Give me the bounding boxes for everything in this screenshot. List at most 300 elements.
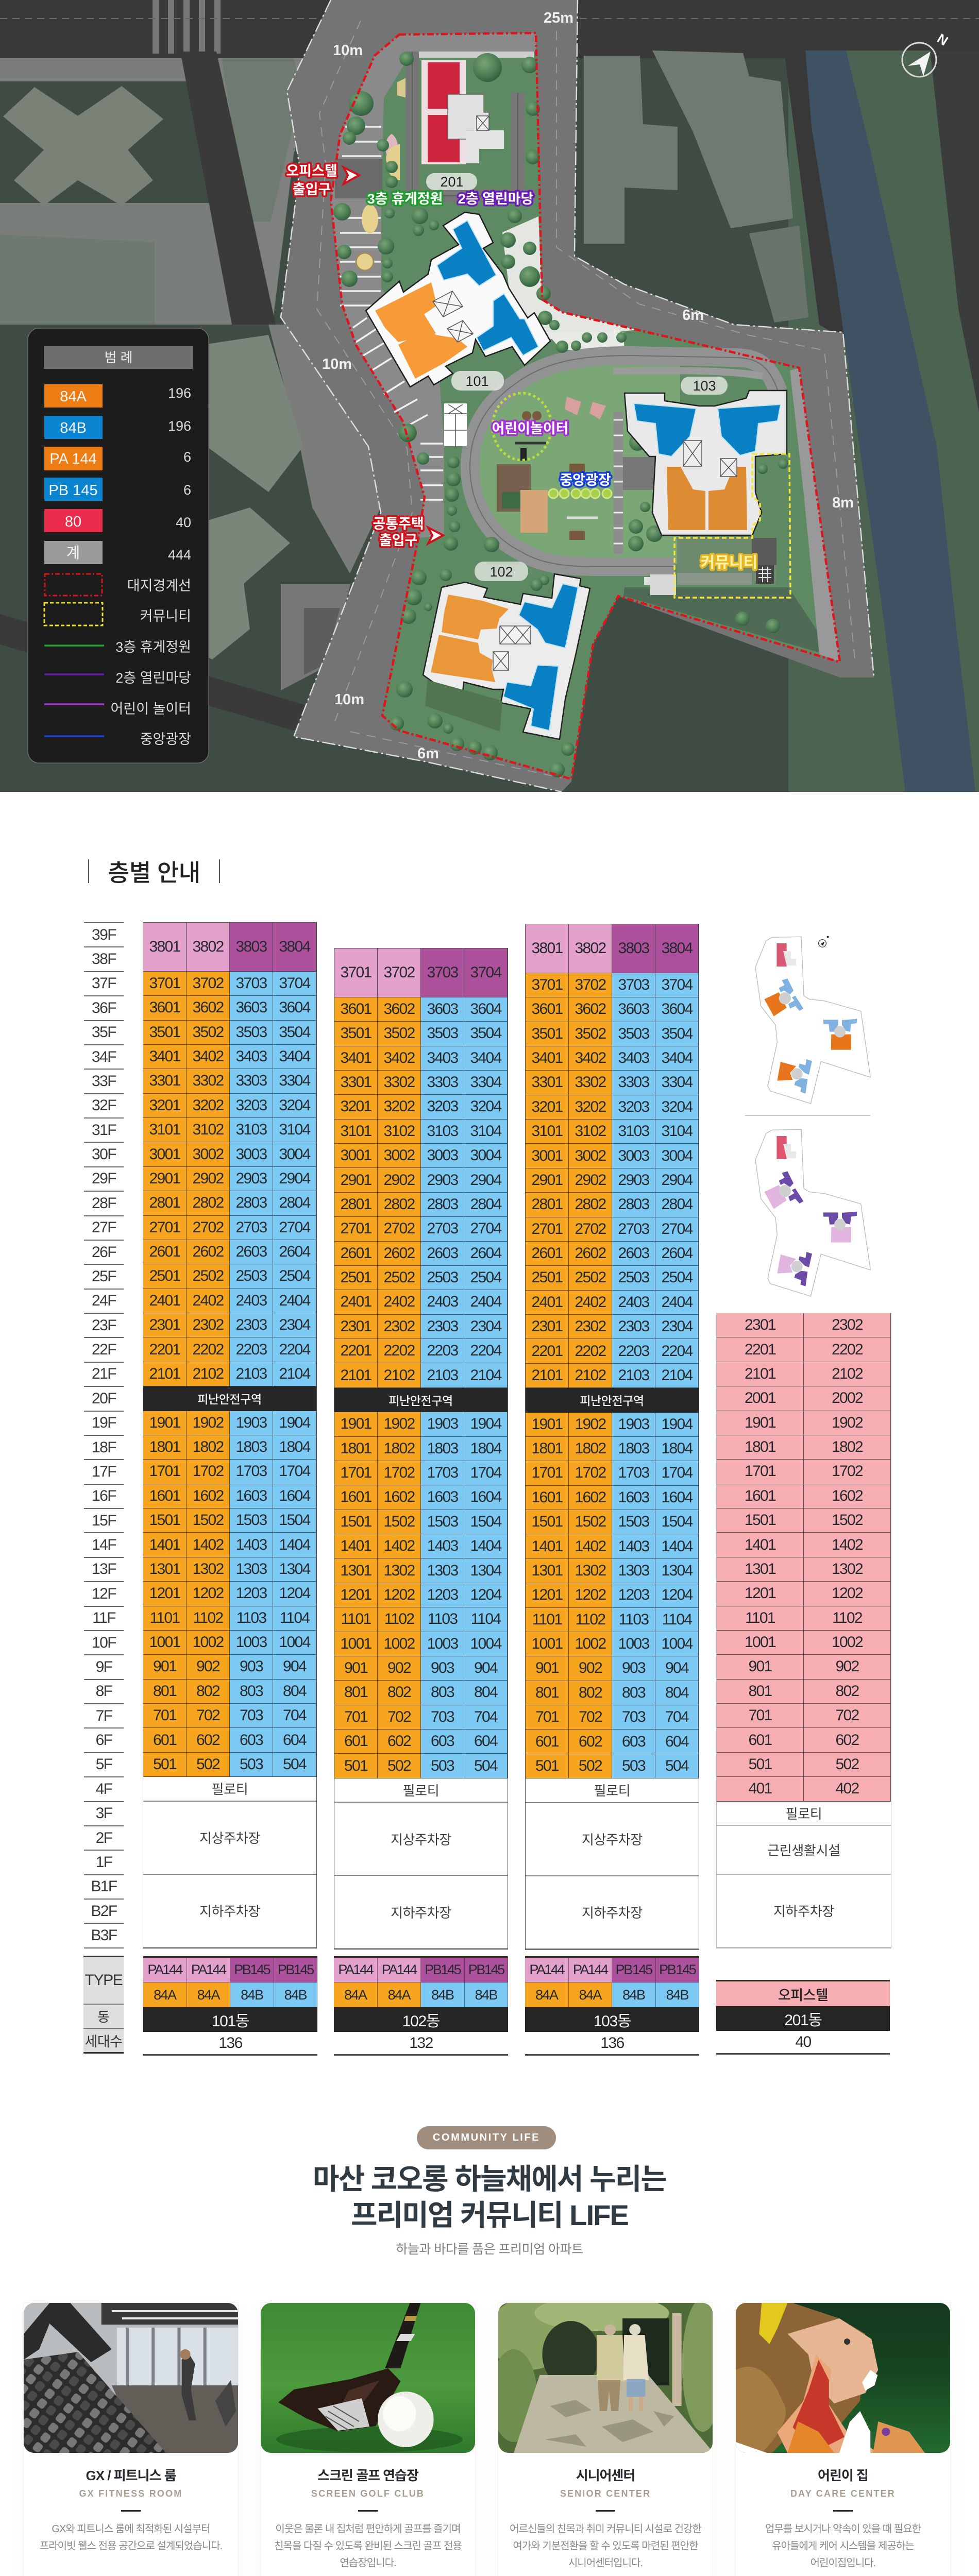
tower 103 unit grid: 3602 bbox=[575, 1001, 605, 1018]
tower 102 unit grid: 501 bbox=[344, 1757, 367, 1774]
tower 102 unit grid: 1603 bbox=[427, 1488, 458, 1505]
tower 101 unit grid: 2304 bbox=[279, 1316, 310, 1333]
tower 201 officetel unit grid: 1902 bbox=[832, 1414, 863, 1431]
tower 101 unit grid: 1104 bbox=[280, 1609, 309, 1626]
tower 102 unit grid: 3501 bbox=[341, 1025, 371, 1042]
tower 102 unit grid: 3201 bbox=[341, 1098, 371, 1115]
tower 101 unit grid: 1504 bbox=[279, 1512, 310, 1529]
floor labels column: 11F bbox=[92, 1609, 115, 1626]
tower 101 type table: PA 144 bbox=[191, 1962, 226, 1977]
tower 103 unit grid: 802 bbox=[579, 1684, 602, 1701]
tower 101 unit grid: 3603 bbox=[236, 999, 266, 1016]
tower 101 unit grid: 1503 bbox=[236, 1512, 266, 1529]
tower 103 type table bbox=[525, 1956, 699, 2056]
tower 101 unit grid: 1303 bbox=[236, 1561, 266, 1578]
tower 102 unit grid: 2404 bbox=[470, 1293, 501, 1310]
tower 102 unit grid: 1103 bbox=[428, 1611, 457, 1628]
tower 102 unit grid: 2902 bbox=[384, 1172, 414, 1189]
tower 101 unit grid: 3401 bbox=[149, 1048, 180, 1065]
tower 103 unit grid: 3504 bbox=[662, 1025, 692, 1042]
tower 102 unit grid: 702 bbox=[387, 1708, 411, 1725]
tower 101 unit grid: 3202 bbox=[193, 1097, 223, 1114]
tower 103 unit grid: 3202 bbox=[575, 1098, 605, 1115]
tower 102 unit grid: 3404 bbox=[470, 1049, 501, 1066]
community pill label bbox=[417, 2126, 556, 2149]
tower 103 type table: PB 145 bbox=[616, 1962, 652, 1977]
floor labels column: 9F bbox=[96, 1658, 112, 1675]
tower 201 officetel unit grid: 1101 bbox=[745, 1609, 775, 1626]
tower 103 unit grid: 1802 bbox=[575, 1440, 605, 1457]
floor labels column: 29F bbox=[92, 1170, 116, 1187]
tower 101 unit grid: 2204 bbox=[279, 1341, 310, 1358]
tower 101 unit grid: 2303 bbox=[236, 1316, 266, 1333]
tower 102 unit grid: 3401 bbox=[341, 1049, 371, 1066]
tower 101 unit grid: 2302 bbox=[193, 1316, 223, 1333]
tower 102 unit grid: 2603 bbox=[427, 1245, 458, 1262]
tower 101 unit grid: 603 bbox=[240, 1732, 263, 1749]
tower 103 unit grid: 601 bbox=[535, 1733, 559, 1750]
tower 102 unit grid: 2804 bbox=[470, 1196, 501, 1213]
tower 101 unit grid: 1302 bbox=[193, 1561, 223, 1578]
tower 103 unit grid: 2302 bbox=[575, 1318, 605, 1335]
tower 103 unit grid: 2804 bbox=[662, 1196, 692, 1213]
tower 101 unit grid: 604 bbox=[283, 1732, 306, 1749]
card: senior center: 어르신들의 친목과 취미 커뮤니티 시설로 건강한 bbox=[510, 2523, 701, 2535]
tower 101 unit grid: 3502 bbox=[193, 1024, 223, 1041]
tower 101 type table: 84A bbox=[197, 1987, 220, 2002]
tower 201 officetel unit grid: 401 bbox=[749, 1780, 771, 1797]
tower 102 unit grid: 2103 bbox=[427, 1367, 458, 1384]
tower 103 unit grid: 704 bbox=[665, 1708, 688, 1725]
tower 103 unit grid: 501 bbox=[535, 1757, 559, 1774]
tower 201 officetel unit grid: 802 bbox=[836, 1683, 858, 1700]
tower 101 unit grid: 1102 bbox=[193, 1609, 223, 1626]
tower 103 unit grid: 3801 bbox=[532, 940, 562, 957]
row label: TYPE bbox=[83, 1956, 124, 2005]
floor labels column: 18F bbox=[92, 1439, 116, 1456]
zone labels: 2층 열린마당 bbox=[458, 191, 534, 207]
tower 101 unit grid: 필로티 bbox=[212, 1782, 248, 1797]
tower 103 unit grid: 1402 bbox=[575, 1538, 605, 1555]
floor labels column: 10F bbox=[92, 1634, 116, 1651]
tower 103 unit grid: 3603 bbox=[618, 1001, 649, 1018]
road width labels: 25m bbox=[544, 10, 573, 26]
tower 102 unit grid bbox=[334, 948, 508, 1950]
tower 103 type table: 84A bbox=[535, 1987, 558, 2002]
tower 103 unit grid: 2604 bbox=[662, 1245, 692, 1262]
tower 103 unit grid: 2904 bbox=[662, 1172, 692, 1189]
tower 101 unit grid: 3504 bbox=[279, 1024, 310, 1041]
compass bbox=[902, 30, 951, 77]
tower 103 type table: 136 bbox=[600, 2034, 624, 2052]
tower 103 unit grid: 2401 bbox=[532, 1294, 562, 1311]
tower 101 unit grid: 2602 bbox=[193, 1243, 223, 1260]
tower 101 unit grid: 지하주차장 bbox=[199, 1904, 260, 1919]
tower 102 unit grid: 2202 bbox=[384, 1342, 414, 1359]
tower 102 unit grid: 2702 bbox=[384, 1220, 414, 1237]
tower 103 unit grid: 3103 bbox=[618, 1123, 649, 1140]
tower 101 unit grid: 3203 bbox=[236, 1097, 266, 1114]
tower 102 unit grid: 1902 bbox=[384, 1415, 414, 1432]
tower 102 unit grid: 1003 bbox=[427, 1635, 458, 1652]
tower 102 unit grid: 3601 bbox=[341, 1001, 371, 1018]
tower 103 unit grid: 3101 bbox=[532, 1123, 562, 1140]
legend panel: PB 145 bbox=[48, 482, 98, 499]
tower 103 unit grid: 1701 bbox=[532, 1464, 562, 1481]
tower 101 unit grid: 2402 bbox=[193, 1292, 223, 1309]
floor labels column: 39F bbox=[92, 926, 116, 943]
tower 201 officetel unit grid: 602 bbox=[836, 1732, 858, 1749]
tower 101 unit grid: 2401 bbox=[149, 1292, 180, 1309]
tower 102 unit grid: 1102 bbox=[384, 1611, 414, 1628]
tower 103 type table: PA 144 bbox=[573, 1962, 607, 1977]
tower 103 unit grid: 3503 bbox=[618, 1025, 649, 1042]
tower 103 unit grid: 3102 bbox=[575, 1123, 605, 1140]
building 102 bbox=[423, 574, 590, 739]
tower 201 officetel unit grid: 2001 bbox=[745, 1389, 775, 1406]
tower 103 unit grid: 602 bbox=[579, 1733, 602, 1750]
legend panel: 커뮤니티 bbox=[140, 608, 191, 624]
tower 102 unit grid: 지상주차장 bbox=[391, 1832, 451, 1848]
tower 101 unit grid: 2902 bbox=[193, 1170, 223, 1187]
tower 103 unit grid: 2402 bbox=[575, 1294, 605, 1311]
legend panel: 어린이 놀이터 bbox=[110, 701, 191, 717]
legend panel: 40 bbox=[176, 515, 191, 530]
tower 101 unit grid: 703 bbox=[240, 1707, 263, 1724]
tower 102 type table: 84A bbox=[388, 1987, 410, 2002]
tower 101 unit grid: 1201 bbox=[149, 1585, 180, 1602]
tower 201 officetel unit grid: 1102 bbox=[832, 1609, 862, 1626]
road width labels: 6m bbox=[417, 745, 439, 762]
tower 101 unit grid: 1001 bbox=[149, 1634, 180, 1651]
tower 101 unit grid: 3602 bbox=[193, 999, 223, 1016]
tower 101 unit grid: 1601 bbox=[149, 1487, 180, 1504]
tower 101 unit grid: 1703 bbox=[236, 1463, 266, 1480]
road width labels bbox=[322, 10, 854, 762]
tower 101 unit grid: 2102 bbox=[193, 1365, 223, 1382]
tower 103 unit grid: 2901 bbox=[532, 1172, 562, 1189]
card: screen golf bbox=[260, 2302, 476, 2576]
tower 103 unit grid: 2203 bbox=[618, 1343, 649, 1360]
floor labels column: 6F bbox=[96, 1732, 112, 1749]
tower 101 unit grid: 2103 bbox=[236, 1365, 266, 1382]
tower 102 unit grid: 2602 bbox=[384, 1245, 414, 1262]
tower 103 unit grid: 2902 bbox=[575, 1172, 605, 1189]
tower 103 unit grid: 3002 bbox=[575, 1147, 605, 1164]
tower 101 unit grid: 1203 bbox=[236, 1585, 266, 1602]
tower 103 unit grid bbox=[525, 924, 699, 1950]
central ring lawn bbox=[474, 358, 680, 564]
tower 102 unit grid: 2303 bbox=[427, 1318, 458, 1335]
tower 201 officetel unit grid: 2002 bbox=[832, 1389, 863, 1406]
tower 102 unit grid: 3001 bbox=[341, 1147, 371, 1164]
tower 101 unit grid: 3003 bbox=[236, 1146, 266, 1163]
tower 103 unit grid: 1501 bbox=[532, 1513, 562, 1530]
floor labels column: B3F bbox=[91, 1927, 117, 1944]
tower 201 officetel unit grid: 801 bbox=[749, 1683, 771, 1700]
tower 101 type table: 84A bbox=[154, 1987, 176, 2002]
card: day care: 유아들에게 케어 시스템을 제공하는 bbox=[772, 2540, 914, 2552]
tower 103 unit grid: 1101 bbox=[532, 1611, 562, 1628]
legend panel: 444 bbox=[168, 547, 191, 563]
tower 103 unit grid: 1104 bbox=[662, 1611, 691, 1628]
tower 102 unit grid: 3102 bbox=[384, 1123, 414, 1140]
tower 102 unit grid: 2504 bbox=[470, 1269, 501, 1286]
tower 102 unit grid: 3202 bbox=[384, 1098, 414, 1115]
tower 201 officetel unit grid: 1601 bbox=[745, 1487, 775, 1504]
photo: elderly couple in a garden bbox=[498, 2303, 713, 2453]
tower 102 unit grid: 3403 bbox=[427, 1049, 458, 1066]
zone labels: 커뮤니티 bbox=[701, 554, 757, 571]
floor labels column: 35F bbox=[92, 1024, 116, 1041]
tower 201 officetel unit grid: 902 bbox=[836, 1658, 858, 1675]
tower 102 unit grid: 3203 bbox=[427, 1098, 458, 1115]
tower 201 officetel unit grid: 1802 bbox=[832, 1438, 863, 1455]
card: screen golf: 친목을 다질 수 있도록 완비된 스크린 골프 전용 bbox=[274, 2540, 462, 2552]
parking lots bbox=[331, 33, 536, 538]
tower 201 officetel unit grid: 1001 bbox=[745, 1634, 775, 1651]
tower 103 unit grid: 1004 bbox=[662, 1635, 692, 1652]
tower 201 officetel unit grid: 702 bbox=[836, 1707, 858, 1724]
tower 101 unit grid: 1802 bbox=[193, 1438, 223, 1455]
tower 102 unit grid: 1004 bbox=[470, 1635, 501, 1652]
legend panel: 2층 열린마당 bbox=[115, 670, 191, 686]
tower 101 unit grid: 3403 bbox=[236, 1048, 266, 1065]
tower 103 unit grid: 3003 bbox=[618, 1147, 649, 1164]
tower 103 unit grid: 2304 bbox=[662, 1318, 692, 1335]
tower 102 unit grid: 3103 bbox=[427, 1123, 458, 1140]
legend panel: 84B bbox=[60, 420, 87, 436]
tower 103 unit grid: 2301 bbox=[532, 1318, 562, 1335]
floor labels column: 33F bbox=[92, 1073, 116, 1090]
tower 101 unit grid: 3002 bbox=[193, 1146, 223, 1163]
tower 102 unit grid: 2401 bbox=[341, 1293, 371, 1310]
tower 103 unit grid: 3502 bbox=[575, 1025, 605, 1042]
tower 103 unit grid: 2104 bbox=[662, 1367, 692, 1384]
tower 103 type table: 84A bbox=[579, 1987, 601, 2002]
road width labels: 10m bbox=[334, 691, 364, 708]
tower 102 unit grid: 2102 bbox=[384, 1367, 414, 1384]
floor labels column: 30F bbox=[92, 1146, 116, 1163]
tower 102 unit grid: 802 bbox=[387, 1684, 411, 1701]
tower 103 unit grid: 3203 bbox=[618, 1098, 649, 1115]
tower 102 unit grid: 1303 bbox=[427, 1562, 458, 1579]
tower 101 unit grid: 1902 bbox=[193, 1414, 223, 1431]
card: senior center: 여가와 기분전환을 할 수 있도록 마련된 편안한 bbox=[513, 2540, 698, 2552]
tower 103 unit grid: 지하주차장 bbox=[582, 1905, 643, 1921]
floor labels column: 5F bbox=[96, 1756, 112, 1773]
tower 101 unit grid: 2503 bbox=[236, 1267, 266, 1284]
tower 103 type table: PA 144 bbox=[529, 1962, 564, 1977]
tower 103 unit grid: 3703 bbox=[618, 976, 649, 993]
tower 101 unit grid: 1403 bbox=[236, 1536, 266, 1553]
row label: building: 동 bbox=[97, 2009, 110, 2025]
tower 103 unit grid: 2704 bbox=[662, 1221, 692, 1238]
tower 101 unit grid: 3503 bbox=[236, 1024, 266, 1041]
tower 103 unit grid: 2602 bbox=[575, 1245, 605, 1262]
key map divider bbox=[745, 1115, 870, 1116]
photo: golf club and ball bbox=[261, 2303, 475, 2453]
tower 101 unit grid: 1004 bbox=[279, 1634, 310, 1651]
tower 103 unit grid: 803 bbox=[622, 1684, 645, 1701]
tower 102 unit grid: 3604 bbox=[470, 1001, 501, 1018]
tower 103 unit grid: 2703 bbox=[618, 1221, 649, 1238]
tower 103 unit grid: 703 bbox=[622, 1708, 645, 1725]
tower 101 type table: 136 bbox=[218, 2034, 242, 2052]
tower 102 unit grid: 필로티 bbox=[403, 1783, 439, 1799]
tower 103 unit grid: 2601 bbox=[532, 1245, 562, 1262]
community boundary bbox=[674, 454, 790, 598]
tower 102 unit grid: 2901 bbox=[341, 1172, 371, 1189]
tower 201 officetel unit grid: 1401 bbox=[745, 1536, 775, 1553]
tower 103 unit grid: 1603 bbox=[618, 1489, 649, 1506]
card: screen golf: 이웃은 물론 내 집처럼 편안하게 골프를 즐기며 bbox=[275, 2523, 461, 2535]
tower 102 type table: PA144 bbox=[382, 1962, 416, 1977]
building 103 bbox=[624, 391, 787, 535]
tower 101 unit grid: 2903 bbox=[236, 1170, 266, 1187]
tower 102 unit grid: 3503 bbox=[427, 1025, 458, 1042]
tower 102 unit grid: 1803 bbox=[427, 1440, 458, 1457]
tower 102 unit grid: 3502 bbox=[384, 1025, 414, 1042]
tower 102 unit grid: 2903 bbox=[427, 1172, 458, 1189]
floor labels column: 17F bbox=[92, 1463, 116, 1480]
tower 101 unit grid: 503 bbox=[240, 1756, 263, 1773]
card: screen golf: SCREEN GOLF CLUB bbox=[311, 2488, 425, 2499]
tower 101 unit grid: 3004 bbox=[279, 1146, 310, 1163]
tower 101 unit grid: 3702 bbox=[193, 975, 223, 992]
road width labels: 10m bbox=[322, 356, 352, 372]
tower 101 unit grid: 704 bbox=[283, 1707, 306, 1724]
tower 103 unit grid: 2201 bbox=[532, 1343, 562, 1360]
tower 101 unit grid: 2201 bbox=[149, 1341, 180, 1358]
tower 101 unit grid: 1704 bbox=[279, 1463, 310, 1480]
tower 101 unit grid: 2504 bbox=[279, 1267, 310, 1284]
floor labels column: 14F bbox=[92, 1536, 116, 1553]
legend panel: 80 bbox=[65, 514, 81, 530]
building number pills: 101 bbox=[465, 374, 489, 389]
floor labels column: 37F bbox=[92, 975, 116, 992]
tower 102 unit grid: 1604 bbox=[470, 1488, 501, 1505]
entrance callouts: 출입구 bbox=[379, 533, 417, 548]
floor labels column: 12F bbox=[92, 1585, 116, 1602]
floor labels column: 3F bbox=[96, 1805, 112, 1822]
tower 101 unit grid: 3201 bbox=[149, 1097, 180, 1114]
tower 102 unit grid: 904 bbox=[474, 1659, 497, 1676]
tower 103 unit grid: 702 bbox=[579, 1708, 602, 1725]
tower 103 unit grid: 2903 bbox=[618, 1172, 649, 1189]
surrounding road bbox=[281, 0, 874, 792]
tower 201 officetel unit grid: 1901 bbox=[745, 1414, 775, 1431]
row label: households: 세대수 bbox=[85, 2034, 123, 2049]
tower 103 unit grid: 1903 bbox=[618, 1416, 649, 1433]
floor labels column: 13F bbox=[92, 1561, 116, 1578]
key map: top floors bbox=[755, 1129, 871, 1297]
tower 103 unit grid: 1803 bbox=[618, 1440, 649, 1457]
road width labels: 10m bbox=[333, 42, 363, 59]
site boundary bbox=[331, 33, 840, 779]
tower 102 unit grid: 1704 bbox=[470, 1464, 501, 1481]
tower 102 unit grid: 2904 bbox=[470, 1172, 501, 1189]
tower 102 unit grid: 3101 bbox=[341, 1123, 371, 1140]
tower 102 unit grid: 2502 bbox=[384, 1269, 414, 1286]
tower 103 unit grid: 3401 bbox=[532, 1049, 562, 1066]
tower 102 unit grid: 601 bbox=[344, 1733, 367, 1750]
tower 103 unit grid: 701 bbox=[535, 1708, 559, 1725]
tower 101 unit grid: 2704 bbox=[279, 1219, 310, 1236]
building 201 bbox=[421, 60, 504, 164]
tower 103 unit grid: 1304 bbox=[662, 1562, 692, 1579]
tower 102 unit grid: 3204 bbox=[470, 1098, 501, 1115]
tower 101 unit grid: 3204 bbox=[279, 1097, 310, 1114]
card: screen golf: 스크린 골프 연습장 bbox=[317, 2468, 418, 2483]
tower 101 unit grid: 2702 bbox=[193, 1219, 223, 1236]
section heading: floor guide: 층별 안내 bbox=[108, 859, 200, 886]
tower 103 unit grid: 2803 bbox=[618, 1196, 649, 1213]
floor labels column: 20F bbox=[92, 1390, 116, 1407]
tower 101 type table: PB145 bbox=[278, 1962, 313, 1977]
tower 103 unit grid: 503 bbox=[622, 1757, 645, 1774]
floor labels column: 31F bbox=[92, 1122, 116, 1139]
tower 102 type table: PB145 bbox=[468, 1962, 504, 1977]
tower 201 officetel unit grid: 502 bbox=[836, 1756, 858, 1773]
tower 101 unit grid: 1804 bbox=[279, 1438, 310, 1455]
trees bbox=[333, 52, 788, 777]
tower 101 unit grid: 801 bbox=[153, 1683, 176, 1700]
tower 101 unit grid: 1402 bbox=[193, 1536, 223, 1553]
tower 102 unit grid: 901 bbox=[344, 1659, 367, 1676]
tower 201 officetel unit grid: 601 bbox=[749, 1732, 771, 1749]
tower 103 unit grid: 3403 bbox=[618, 1049, 649, 1066]
building number pills: 103 bbox=[693, 378, 716, 394]
floor labels column: 1F bbox=[96, 1854, 112, 1871]
tower 101 unit grid: 2404 bbox=[279, 1292, 310, 1309]
tower 101 unit grid: 901 bbox=[153, 1658, 176, 1675]
tower 101 unit grid: 1603 bbox=[236, 1487, 266, 1504]
legend panel: 계 bbox=[66, 545, 80, 562]
tower 103 unit grid: 3004 bbox=[662, 1147, 692, 1164]
tower 101 unit grid: 1604 bbox=[279, 1487, 310, 1504]
tower 103 unit grid: 1403 bbox=[618, 1538, 649, 1555]
floor labels column: 8F bbox=[96, 1683, 112, 1700]
tower 101 unit grid: 1101 bbox=[150, 1609, 179, 1626]
tower 201 officetel unit grid: 501 bbox=[749, 1756, 771, 1773]
tower 102 unit grid: 2503 bbox=[427, 1269, 458, 1286]
tower 103 unit grid: 1704 bbox=[662, 1464, 692, 1481]
tower 103 unit grid: 2501 bbox=[532, 1269, 562, 1286]
legend panel: 196 bbox=[168, 385, 191, 401]
tower 102 unit grid: 703 bbox=[431, 1708, 454, 1725]
tower 201 type table: 201동 bbox=[784, 2012, 822, 2029]
floor labels column: 2F bbox=[96, 1829, 112, 1846]
tower 201 officetel unit grid: 2302 bbox=[832, 1316, 863, 1333]
tower 201 officetel unit grid: 2102 bbox=[832, 1365, 863, 1382]
tower 101 unit grid: 3304 bbox=[279, 1072, 310, 1089]
tower 101 type table: PB145 bbox=[234, 1962, 269, 1977]
tower 103 unit grid: 1604 bbox=[662, 1489, 692, 1506]
tower 101 unit grid: 1602 bbox=[193, 1487, 223, 1504]
tower 102 type table bbox=[334, 1956, 508, 2056]
tower 101 unit grid: 1401 bbox=[149, 1536, 180, 1553]
tower 102 unit grid: 2104 bbox=[470, 1367, 501, 1384]
legend panel: 3층 휴게정원 bbox=[115, 639, 191, 655]
tower 102 unit grid: 1304 bbox=[470, 1562, 501, 1579]
tower 102 type table: 132 bbox=[409, 2034, 433, 2052]
floor labels column: 21F bbox=[92, 1365, 116, 1382]
tower 103 unit grid: 1703 bbox=[618, 1464, 649, 1481]
tower 103 unit grid: 3804 bbox=[662, 940, 692, 957]
zone labels: 어린이놀이터 bbox=[492, 421, 569, 436]
tower 102 unit grid: 3704 bbox=[470, 964, 501, 981]
